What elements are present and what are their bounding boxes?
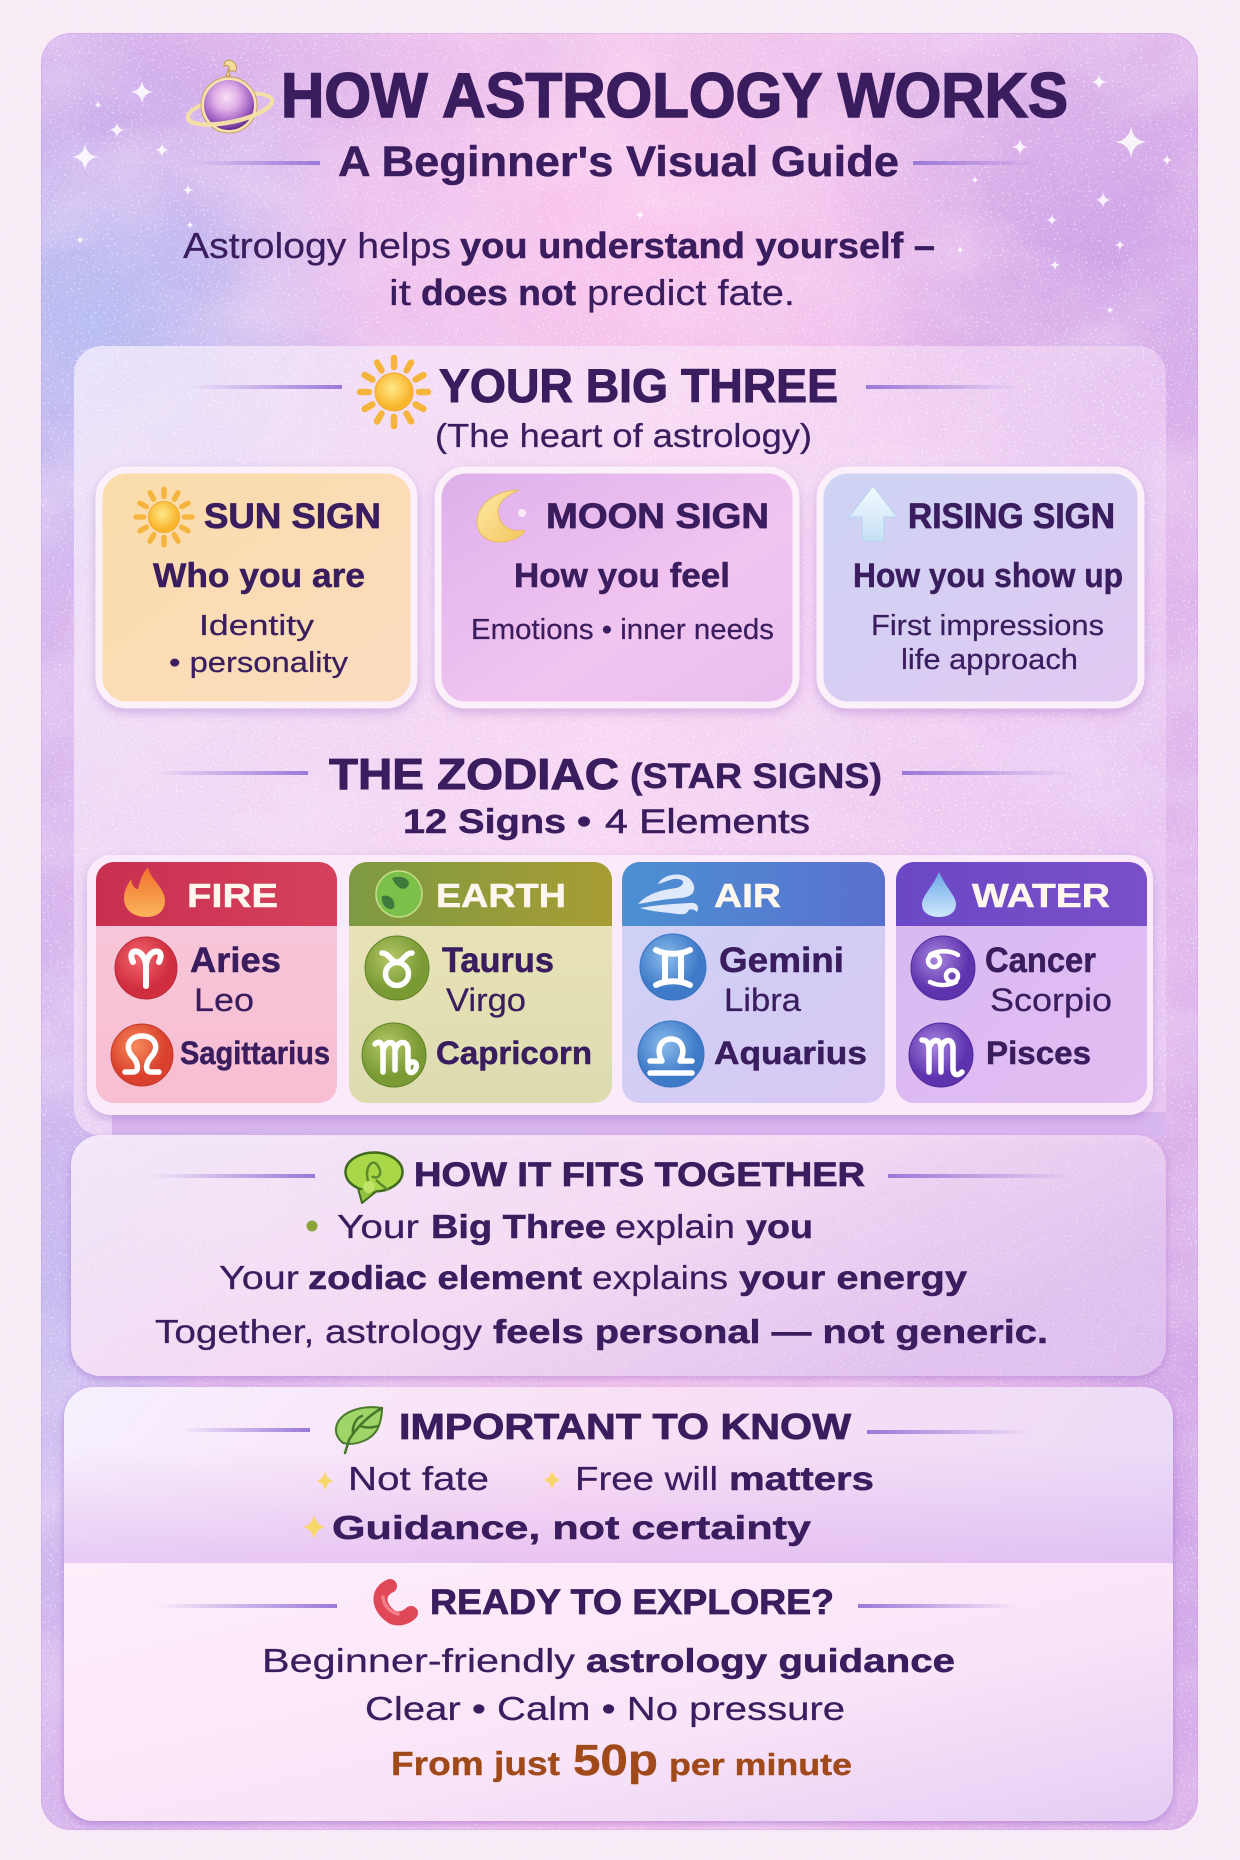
sign: leo: Sagittarius — [180, 1035, 330, 1071]
heading: the zodiac: THE ZODIAC — [329, 750, 619, 799]
icon: crescent moon — [477, 490, 526, 542]
line: personal not generic: Together, astrology — [155, 1313, 483, 1350]
icon: wind swirls — [638, 874, 698, 914]
card: moon sign: How you feel — [514, 557, 730, 595]
sign: aries — [115, 937, 281, 1018]
sign: leo — [111, 1024, 330, 1086]
line: price: per minute — [669, 1747, 852, 1782]
column: air: AIR — [714, 877, 781, 914]
card: sun sign: Identity — [199, 610, 315, 642]
icon: water drop — [922, 872, 956, 917]
icon: up arrow — [849, 486, 897, 541]
column: earth: EARTH — [436, 877, 566, 914]
icon: leaf — [336, 1407, 382, 1453]
panel: important to know and ready to explore: IMPORTANT TO KNOW — [399, 1406, 851, 1447]
line: personal not generic: feels personal — not generic. — [493, 1313, 1048, 1350]
sign: virgo: Capricorn — [436, 1035, 592, 1071]
line: big three explain you: Your — [337, 1208, 419, 1245]
sign: aries: Aries — [190, 941, 281, 980]
line: beginner friendly: Beginner-friendly — [262, 1642, 576, 1679]
panel: how it fits together: HOW IT FITS TOGETHER — [414, 1156, 865, 1194]
icon: phone — [380, 1586, 411, 1618]
subheading: 12 signs 4 elements: 4 Elements — [605, 803, 810, 841]
card: rising sign: life approach — [901, 644, 1078, 676]
sign: libra: Aquarius — [714, 1035, 867, 1071]
line: price: 50p — [573, 1736, 658, 1785]
line: big three explain you: Big Three — [431, 1208, 606, 1245]
line: price: From just — [391, 1745, 560, 1782]
sign: virgo — [362, 1023, 592, 1087]
sign: gemini — [640, 934, 844, 1018]
card: moon sign: MOON SIGN — [546, 497, 769, 536]
sign: scorpio — [909, 1023, 1091, 1087]
card: sun sign: • personality — [169, 647, 349, 679]
line: personal not generic — [155, 1313, 1048, 1350]
zodiac table container — [87, 855, 1153, 1115]
sign: cancer: Scorpio — [990, 982, 1112, 1018]
column: air — [622, 862, 885, 1103]
card: rising sign: How you show up — [853, 557, 1123, 595]
sign: gemini: Libra — [724, 982, 801, 1018]
card: moon sign — [438, 470, 796, 705]
column: fire — [96, 862, 337, 1103]
card: rising sign — [820, 470, 1141, 705]
intro text: you understand yourself – — [460, 225, 935, 266]
subheading: heart of astrology: (The heart of astrology) — [435, 417, 812, 454]
panel: big three and zodiac backdrop — [74, 346, 1166, 1136]
icon: green speech bubble — [346, 1152, 402, 1203]
speckles over panel — [74, 346, 1166, 1136]
line: zodiac element: explains — [592, 1259, 728, 1296]
icon: sun — [360, 358, 428, 426]
column: fire: FIRE — [187, 877, 278, 914]
line: zodiac element: your energy — [739, 1259, 968, 1296]
intro text: Astrology helps — [183, 225, 451, 266]
icon: globe — [376, 871, 422, 917]
line: zodiac element — [219, 1259, 968, 1296]
line: zodiac element: zodiac element — [308, 1259, 582, 1296]
sign: taurus: Virgo — [446, 982, 526, 1018]
heading: your big three — [190, 358, 1020, 426]
card: rising sign: RISING SIGN — [908, 497, 1115, 536]
bullet row: not fate, free will: Not fate — [348, 1460, 489, 1497]
heading: the zodiac — [154, 750, 1074, 799]
sign: scorpio: Pisces — [986, 1035, 1091, 1071]
icon: flame — [124, 867, 165, 917]
line: beginner friendly — [262, 1642, 955, 1679]
panel: important to know and ready to explore — [64, 1387, 1173, 1821]
sign: taurus — [365, 936, 554, 1018]
sign: taurus: Taurus — [442, 941, 554, 980]
line: price — [391, 1736, 852, 1785]
icon: small sun — [136, 489, 192, 545]
sign: cancer — [911, 936, 1112, 1018]
line: clear calm: Clear • Calm • No pressure — [365, 1690, 845, 1727]
card: sun sign — [99, 470, 414, 705]
sign: libra — [638, 1021, 867, 1087]
sign: cancer: Cancer — [985, 941, 1096, 980]
line: big three explain you — [337, 1208, 813, 1245]
column: earth — [349, 862, 612, 1103]
subheading: 12 signs 4 elements: 12 Signs • — [403, 803, 591, 841]
section: ready to explore — [64, 1563, 1173, 1821]
column: water: WATER — [972, 877, 1110, 914]
line: big three explain you: you — [746, 1208, 813, 1245]
line: zodiac element: Your — [219, 1259, 299, 1296]
section: ready to explore: READY TO EXPLORE? — [430, 1583, 834, 1622]
card: sun sign: SUN SIGN — [204, 497, 381, 536]
bullet: guidance: Guidance, not certainty — [332, 1509, 812, 1546]
card: moon sign: Emotions • inner needs — [471, 614, 774, 646]
panel: how it fits together — [71, 1135, 1166, 1376]
title: HOW ASTROLOGY WORKS — [281, 61, 1068, 131]
subtitle with decorative lines — [191, 138, 1040, 186]
card: rising sign: First impressions — [871, 610, 1104, 642]
heading: the zodiac: (STAR SIGNS) — [630, 757, 882, 796]
icon: planet with ring — [185, 60, 275, 133]
line: big three explain you: explain — [615, 1208, 735, 1245]
intro text: does not — [421, 272, 576, 313]
line: beginner friendly: astrology guidance — [586, 1642, 955, 1679]
bullet row: not fate, free will — [316, 1460, 874, 1497]
bullet row: not fate, free will: matters — [729, 1460, 874, 1497]
heading: your big three: YOUR BIG THREE — [439, 359, 838, 412]
card: sun sign: Who you are — [153, 557, 365, 595]
sign: aries: Leo — [194, 982, 254, 1018]
bullet — [306, 1220, 318, 1232]
subtitle with decorative lines: A Beginner's Visual Guide — [338, 138, 899, 186]
purple gap band under zodiac table — [112, 1112, 1166, 1136]
intro text: it — [389, 272, 411, 313]
bullet row: not fate, free will: Free will — [575, 1460, 718, 1497]
intro text: predict fate. — [587, 272, 795, 313]
intro text — [183, 225, 935, 313]
column: water — [896, 862, 1147, 1103]
subheading: 12 signs 4 elements — [403, 803, 810, 841]
sign: gemini: Gemini — [719, 941, 844, 980]
